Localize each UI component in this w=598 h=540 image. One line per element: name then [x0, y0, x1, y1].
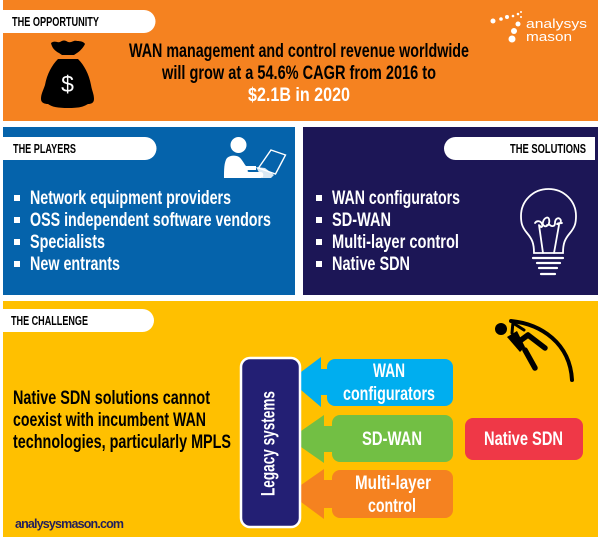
challenge text: Native SDN solutions cannot — [13, 387, 210, 409]
challenge text: technologies, particularly MPLS — [13, 431, 231, 453]
orange arrow: Multi-layer control: Multi-layer — [355, 472, 431, 494]
blue arrow: WAN configurators: WAN — [373, 360, 405, 382]
website: analysysmason.com — [15, 517, 124, 531]
title text — [129, 40, 469, 106]
blue arrow: WAN configurators: configurators — [343, 383, 435, 405]
legacy systems box: Legacy systems — [258, 391, 280, 496]
panel: the players — [3, 127, 295, 295]
title text: $2.1B in 2020 — [248, 84, 350, 106]
icon: light bulb — [521, 189, 576, 274]
legacy systems box — [241, 358, 300, 527]
heading: the opportunity — [3, 10, 156, 33]
title text: WAN management and control revenue worldwide — [129, 40, 469, 62]
panel: the challenge — [3, 301, 598, 537]
native SDN box — [465, 418, 583, 460]
logo: analysys mason: mason — [526, 30, 572, 44]
logo: analysys mason: analysys — [526, 17, 587, 31]
heading: the opportunity: THE OPPORTUNITY — [12, 14, 99, 29]
list: players: OSS independent software vendors — [30, 209, 271, 231]
title text: will grow at a 54.6% CAGR from 2016 to — [161, 62, 436, 84]
heading: the challenge — [3, 309, 154, 332]
orange arrow: Multi-layer control: control — [368, 495, 416, 517]
icon: money bag — [41, 40, 94, 108]
list: players: Specialists — [30, 231, 105, 253]
list: solutions — [316, 187, 460, 275]
list: players: Network equipment providers — [30, 187, 231, 209]
list: players — [14, 187, 271, 275]
heading: the challenge: THE CHALLENGE — [11, 313, 88, 328]
list: solutions: SD-WAN — [332, 209, 391, 231]
list: solutions: WAN configurators — [332, 187, 460, 209]
green arrow: SD-WAN: SD-WAN — [362, 428, 422, 450]
green arrow: SD-WAN — [301, 415, 453, 463]
native SDN box: Native SDN — [484, 428, 563, 450]
icon: person at laptop — [224, 137, 286, 178]
list: players: New entrants — [30, 253, 120, 275]
heading: the players: THE PLAYERS — [13, 141, 76, 156]
list: solutions: Multi-layer control — [332, 231, 459, 253]
icon: money bag: $ — [61, 71, 74, 97]
orange arrow: Multi-layer control — [301, 469, 453, 519]
challenge text: coexist with incumbent WAN — [13, 409, 206, 431]
logo: analysys mason — [490, 11, 587, 44]
panel: the solutions — [303, 127, 598, 295]
icon: pole vaulter — [495, 321, 572, 380]
list: solutions: Native SDN — [332, 253, 410, 275]
heading: the solutions — [444, 137, 595, 160]
blue arrow: WAN configurators — [301, 357, 453, 407]
challenge text — [13, 387, 231, 453]
heading: the players — [3, 137, 156, 160]
panel: the opportunity — [3, 0, 598, 121]
